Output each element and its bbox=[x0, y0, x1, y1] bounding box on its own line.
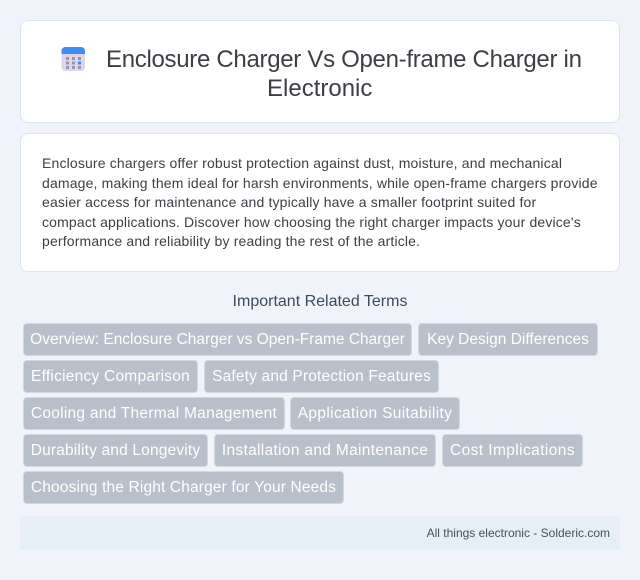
summary text: easier access for maintenance and typically have a smaller footprint suited for bbox=[42, 194, 536, 210]
heading: Enclosure Charger Vs Open-frame Charger in bbox=[106, 46, 582, 73]
tag: Durability and Longevity bbox=[31, 442, 200, 459]
tag bbox=[24, 472, 343, 503]
tag list bbox=[23, 323, 598, 504]
tag: Application Suitability bbox=[298, 405, 452, 422]
tag bbox=[24, 361, 197, 392]
footer bar bbox=[20, 516, 620, 550]
tag: Installation and Maintenance bbox=[222, 442, 428, 459]
tag bbox=[24, 435, 207, 466]
footer text: All things electronic - Solderic.com bbox=[427, 526, 610, 540]
tag: Overview: Enclosure Charger vs Open-Frame Charger bbox=[30, 331, 405, 348]
tag bbox=[215, 435, 435, 466]
tag bbox=[443, 435, 582, 466]
summary text: Enclosure chargers offer robust protection against dust, moisture, and mechanical bbox=[42, 155, 562, 171]
panel: title card bbox=[20, 20, 620, 123]
icon: calendar bbox=[62, 47, 85, 71]
tag bbox=[419, 324, 597, 355]
tag: Choosing the Right Charger for Your Needs bbox=[31, 479, 336, 496]
tag: Cooling and Thermal Management bbox=[31, 405, 277, 422]
tag: Key Design Differences bbox=[427, 331, 589, 348]
tag: Efficiency Comparison bbox=[31, 368, 190, 385]
summary text: performance and reliability by reading the rest of the article. bbox=[42, 233, 420, 249]
heading bbox=[106, 46, 582, 102]
tag: Safety and Protection Features bbox=[212, 368, 431, 385]
tag bbox=[291, 398, 459, 429]
summary text: damage, making them ideal for harsh environments, while open-frame chargers provide bbox=[42, 174, 598, 190]
tag bbox=[205, 361, 438, 392]
tag bbox=[24, 398, 284, 429]
tag bbox=[24, 324, 411, 355]
tag: Cost Implications bbox=[450, 442, 575, 459]
section heading: related terms: Important Related Terms bbox=[233, 293, 407, 310]
panel: summary card bbox=[20, 133, 620, 272]
summary text bbox=[42, 155, 598, 249]
heading: Electronic bbox=[267, 75, 372, 102]
summary text: compact applications. Discover how choosing the right charger impacts your device's bbox=[42, 214, 581, 230]
